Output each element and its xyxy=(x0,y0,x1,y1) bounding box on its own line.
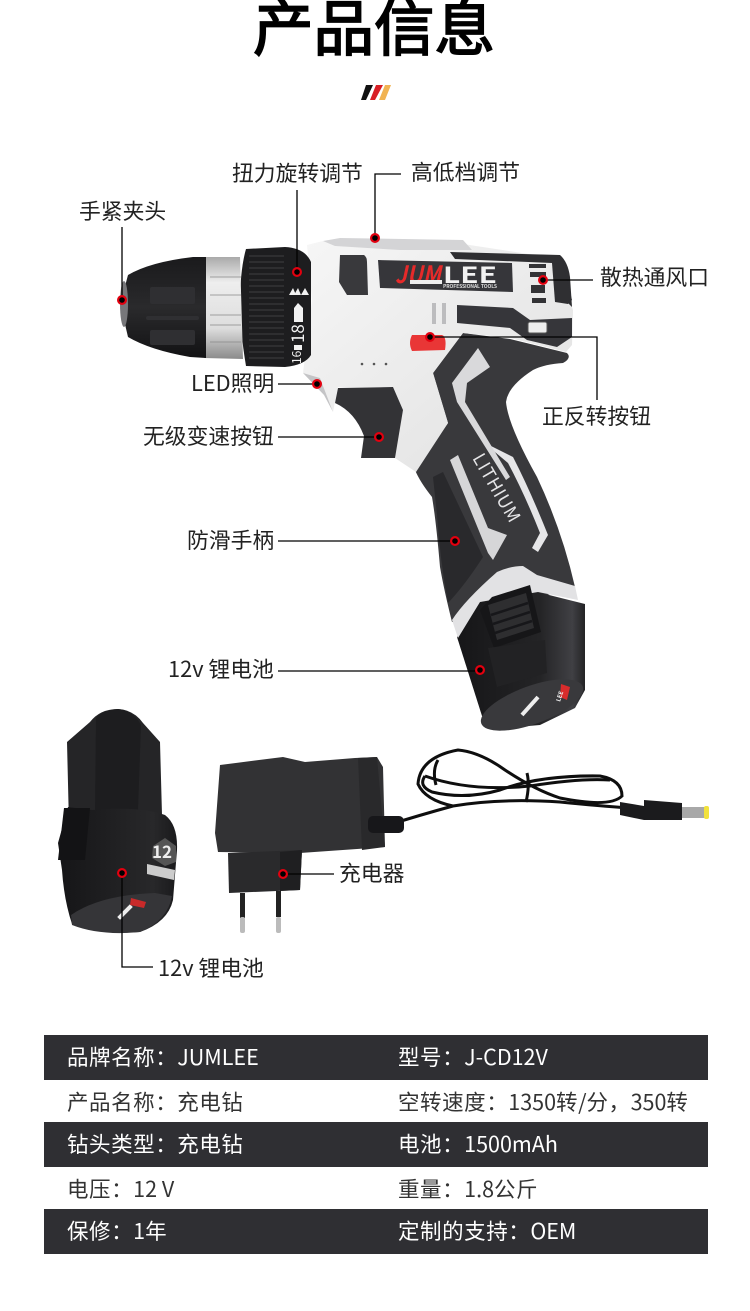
drill handle white trim xyxy=(450,348,548,560)
row: warranty and customization: 保修：1年 xyxy=(67,1215,167,1246)
drill chuck nose xyxy=(120,281,128,327)
callout: speed gear xyxy=(370,156,520,243)
row: product name and speed: 空转速度：1350转/分，350转 xyxy=(398,1086,688,1117)
drill side slot xyxy=(339,255,368,295)
callout: vent: 散热通风口 xyxy=(600,261,709,292)
callout: direction switch xyxy=(425,332,651,431)
callout: torque adjustment xyxy=(232,157,363,277)
callout: drill battery xyxy=(168,653,485,684)
drill logo plate xyxy=(378,255,513,292)
battery 12V badge xyxy=(147,838,176,880)
callout: vent xyxy=(538,261,709,292)
callout: trigger: 无级变速按钮 xyxy=(143,420,274,451)
drill handle xyxy=(415,333,575,622)
row: brand and model: 品牌名称：JUMLEE xyxy=(67,1041,259,1072)
row: voltage and weight xyxy=(67,1173,538,1204)
row: brand and model xyxy=(67,1041,548,1072)
row: bit type and battery: 电池：1500mAh xyxy=(398,1128,558,1159)
drill rear black cover xyxy=(450,252,572,307)
drill torque collar xyxy=(240,247,311,367)
spec table xyxy=(44,1035,708,1254)
drill torque collar: 16 xyxy=(288,350,305,364)
callout: charger xyxy=(278,857,405,888)
row: product name and speed xyxy=(67,1086,688,1117)
drill battery base label xyxy=(475,669,589,741)
drill grip panel xyxy=(433,472,483,603)
charger product xyxy=(215,750,709,933)
callout: trigger xyxy=(143,420,384,451)
drill product illustration xyxy=(120,238,589,741)
callout: LED xyxy=(191,367,322,398)
drill battery latch xyxy=(480,585,541,648)
drill top grey cap xyxy=(323,238,472,250)
callout: chuck: 手紧夹头 xyxy=(79,195,166,226)
callout: drill battery: 12v 锂电池 xyxy=(168,653,274,684)
charger cable xyxy=(385,750,630,826)
drill battery xyxy=(452,566,589,741)
row: voltage and weight: 电压：12 V xyxy=(67,1173,175,1204)
callout: direction switch: 正反转按钮 xyxy=(542,400,651,431)
drill chuck silver sleeve xyxy=(204,257,243,359)
row: bit type and battery xyxy=(67,1128,558,1159)
drill torque collar: 18 xyxy=(284,324,309,343)
callout: LED: LED照明 xyxy=(191,367,274,398)
drill body white shell xyxy=(303,241,573,472)
drill body vents xyxy=(432,303,446,324)
drill battery white ring xyxy=(452,566,578,638)
callout: spare battery: 12v 锂电池 xyxy=(158,952,264,983)
drill chuck xyxy=(124,257,206,358)
row: warranty and customization: 定制的支持：OEM xyxy=(398,1215,576,1246)
title accent stripes xyxy=(361,85,391,100)
row: voltage and weight: 重量：1.8公斤 xyxy=(398,1173,538,1204)
drill LITHIUM lettering: LITHIUM xyxy=(467,448,527,527)
battery base label xyxy=(71,893,172,933)
battery 12V badge: 12 xyxy=(152,838,172,863)
charger housing xyxy=(215,757,385,853)
row: warranty and customization xyxy=(67,1215,576,1246)
callout: torque adjustment: 扭力旋转调节 xyxy=(232,157,363,188)
charger plug base xyxy=(228,850,302,893)
drill battery: LEE xyxy=(553,689,565,703)
charger strain relief xyxy=(368,816,404,833)
row: bit type and battery: 钻头类型：充电钻 xyxy=(67,1128,243,1159)
drill vent grille xyxy=(529,264,546,303)
drill logo plate: JUM xyxy=(395,255,443,290)
callout: charger: 充电器 xyxy=(339,857,405,888)
callout: grip xyxy=(187,524,460,555)
drill trigger xyxy=(335,387,403,458)
callout: speed gear: 高低档调节 xyxy=(411,156,520,187)
drill small button xyxy=(528,322,547,333)
row: brand and model: 型号：J-CD12V xyxy=(398,1041,548,1072)
row: product name and speed: 产品名称：充电钻 xyxy=(67,1086,243,1117)
drill logo plate: PROFESSIONAL TOOLS xyxy=(443,283,497,290)
drill side dark strip xyxy=(457,305,572,347)
drill lower body shading xyxy=(303,373,333,412)
drill logo plate: LEE xyxy=(443,258,497,290)
callout: grip: 防滑手柄 xyxy=(187,524,274,555)
battery product xyxy=(58,709,177,933)
callout: spare battery xyxy=(117,868,264,983)
charger DC connector xyxy=(620,800,709,820)
drill red direction switch xyxy=(410,335,446,351)
charger pins xyxy=(240,891,281,933)
callout: chuck xyxy=(79,195,166,305)
